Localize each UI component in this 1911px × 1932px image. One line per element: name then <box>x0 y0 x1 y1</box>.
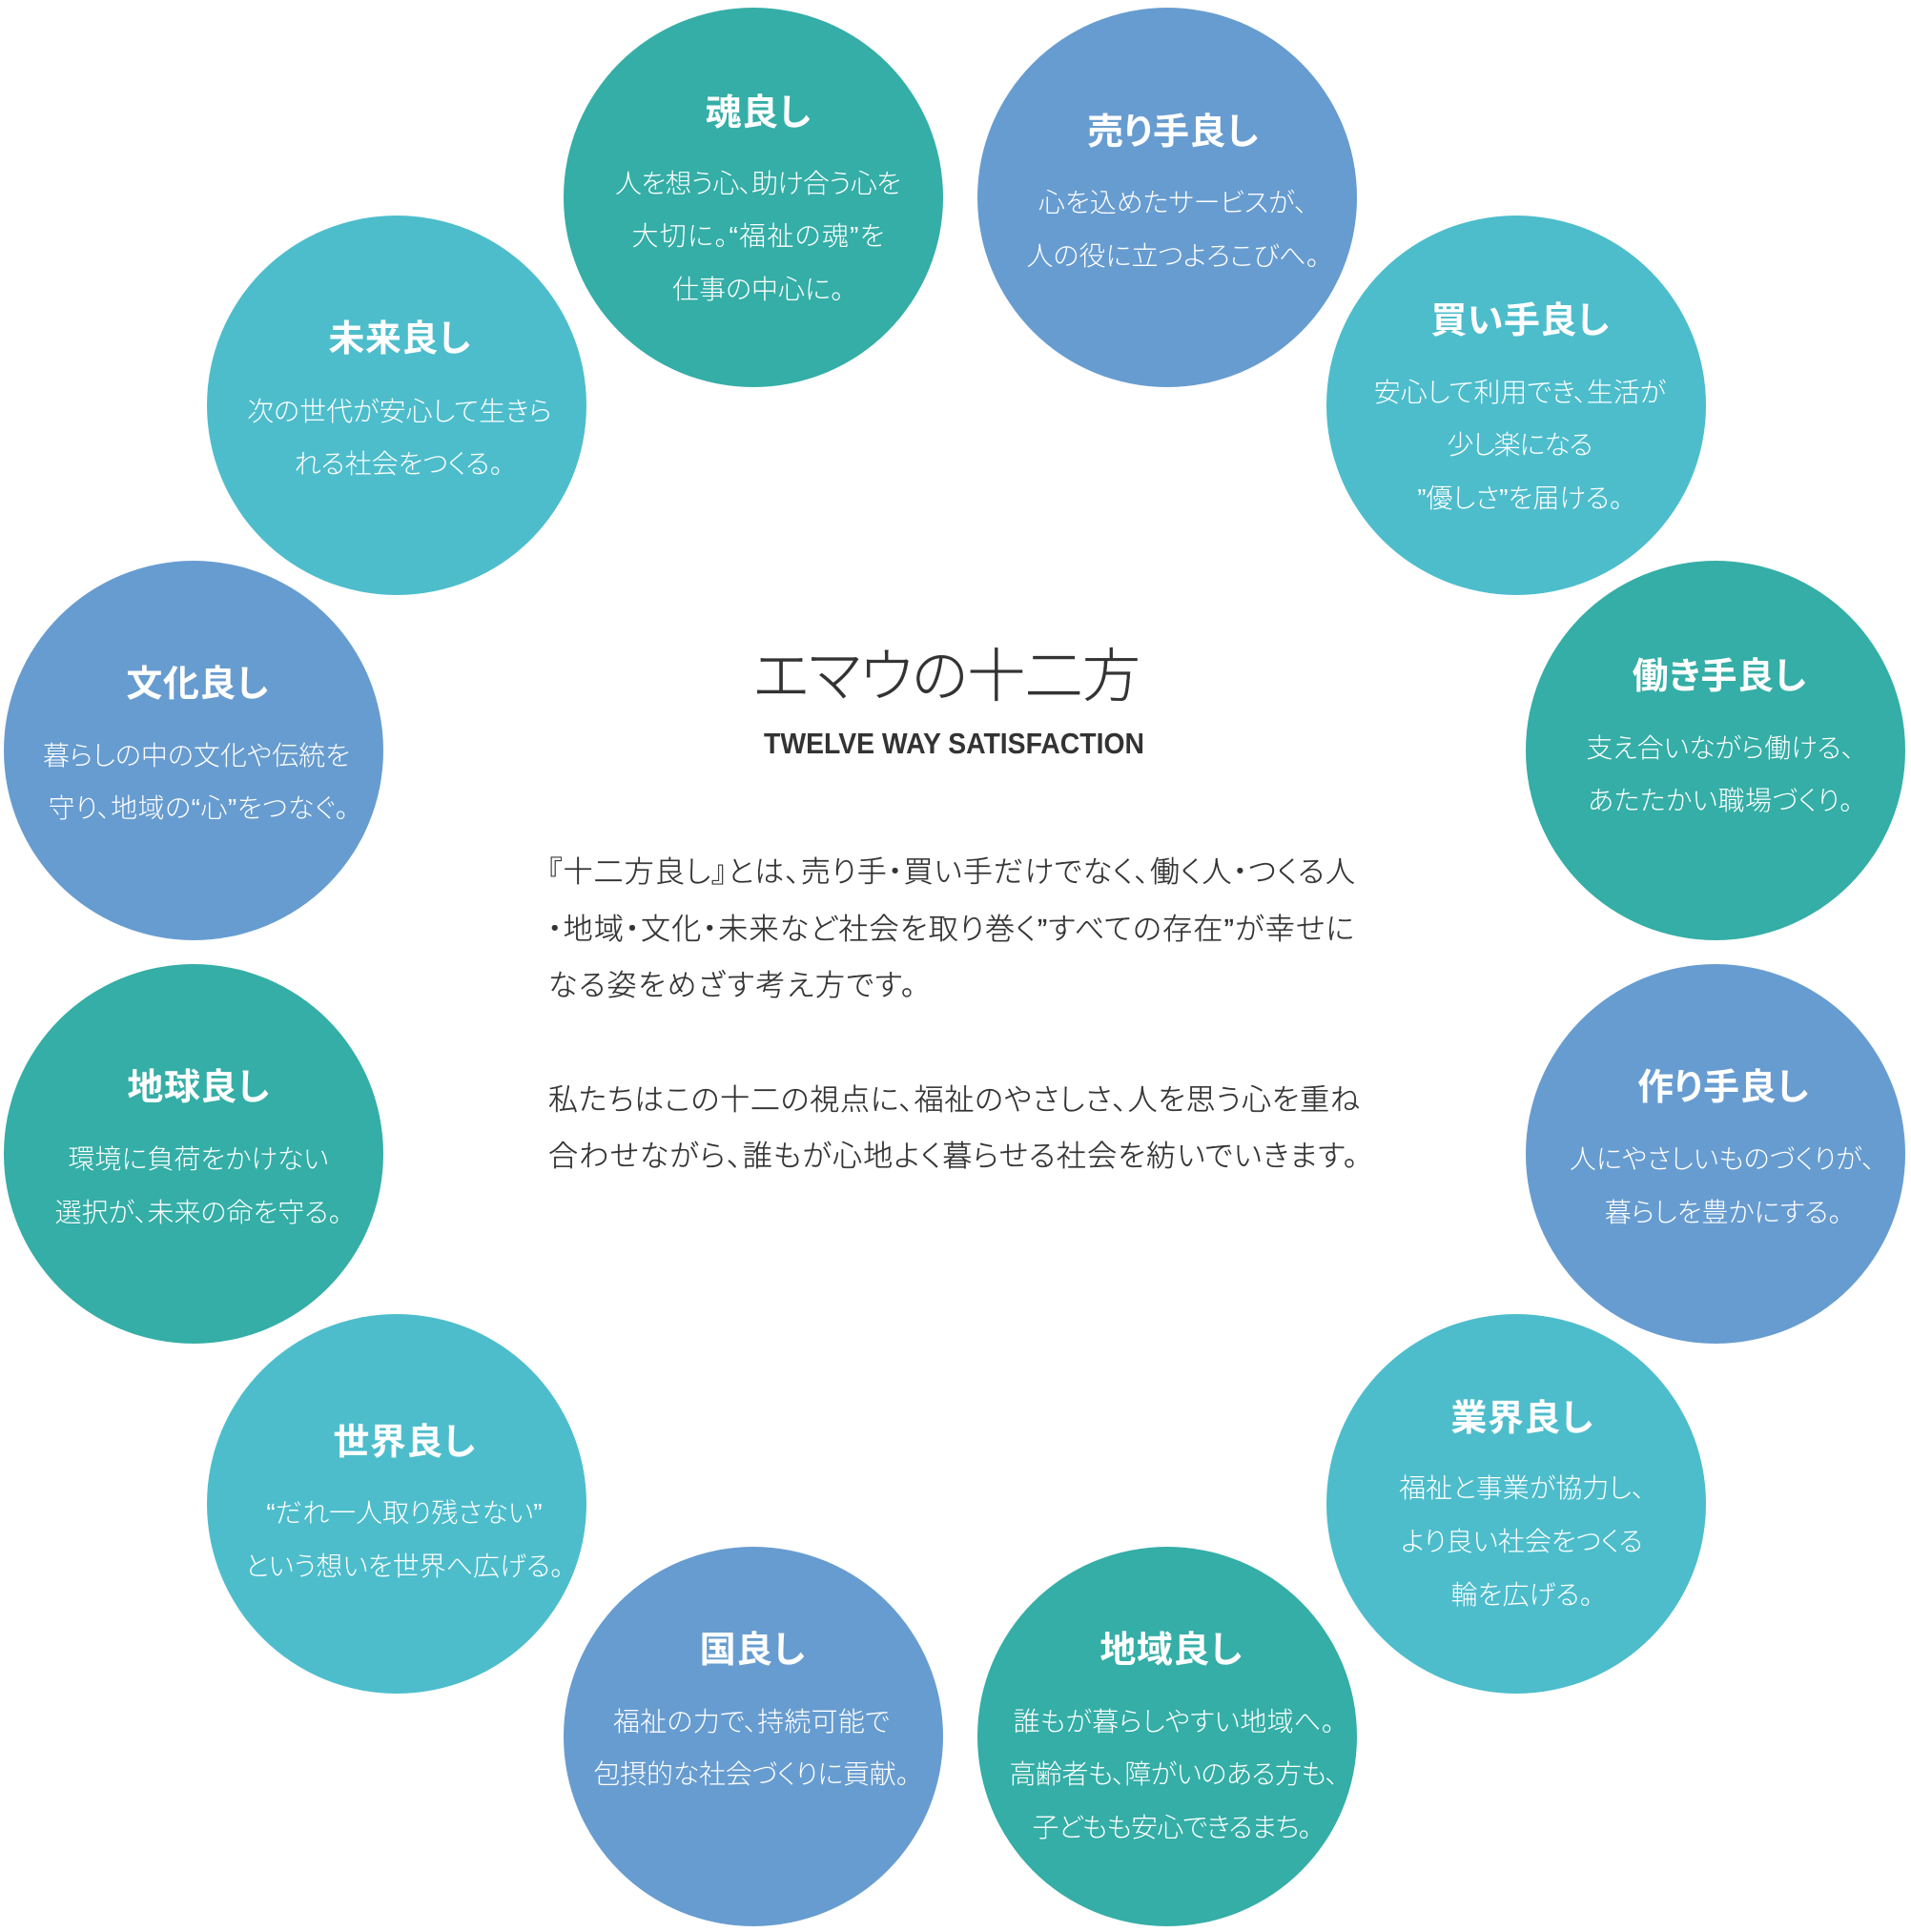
panel: 未来良し: れる社会をつくる。 <box>294 449 503 479</box>
panel: 未来良し: 次の世代が安心して生きら <box>247 397 552 426</box>
text block: description: 合わせながら、誰もが心地よく暮らせる社会を紡いでいきます。 <box>548 1140 1358 1173</box>
panel: 働き手良し: 支え合いながら働ける、 <box>1586 733 1855 763</box>
panel: 地球良し <box>4 964 383 1344</box>
panel: 魂良し: 人を想う心、助け合う心を <box>615 169 901 198</box>
panel: 売り手良し: 心を込めたサービスが、 <box>1038 188 1307 217</box>
text block: description: ・地域・文化・未来など社会を取り巻く”すべての存在”が幸せに <box>547 913 1354 946</box>
panel: 地球良し: 選択が、未来の命を守る。 <box>55 1198 341 1227</box>
panel: 業界良し <box>1326 1314 1706 1694</box>
panel: 魂良し: 大切に。“福祉の魂”を <box>631 221 885 251</box>
panel: 働き手良し <box>1526 561 1905 940</box>
panel: 地域良し: 子どもも安心できるまち。 <box>1032 1813 1312 1842</box>
panel: 地域良し: 高齢者も、障がいのある方も、 <box>1009 1759 1339 1789</box>
panel: 業界良し: 福祉と事業が協力し、 <box>1399 1473 1645 1503</box>
panel: 魂良し <box>564 8 943 387</box>
panel: 買い手良し: ”優しさ”を届ける。 <box>1417 483 1623 513</box>
panel: 世界良し: という想いを世界へ広げる。 <box>245 1552 564 1581</box>
panel: 文化良し: 守り、地域の“心”をつなぐ。 <box>48 793 349 823</box>
panel: 業界良し: 業界良し <box>1450 1399 1593 1439</box>
panel: 地域良し: 地域良し <box>1099 1631 1243 1671</box>
panel: 国良し: 国良し <box>700 1631 805 1671</box>
text block: description: なる姿をめざす考え方です。 <box>548 969 915 1002</box>
panel: 作り手良し <box>1526 964 1905 1344</box>
panel: 売り手良し: 売り手良し <box>1087 113 1259 153</box>
panel: 働き手良し: 働き手良し <box>1633 657 1806 697</box>
panel: 国良し: 包摂的な社会づくりに貢献。 <box>593 1759 910 1789</box>
panel: 働き手良し: あたたかい職場づくり。 <box>1588 786 1853 815</box>
panel: 作り手良し: 暮らしを豊かにする。 <box>1605 1198 1841 1227</box>
panel: 地域良し <box>977 1547 1357 1926</box>
panel: 世界良し: “だれ一人取り残さない” <box>266 1498 543 1528</box>
panel: 作り手良し: 作り手良し <box>1637 1068 1809 1108</box>
title: エマウの十二方 <box>753 644 1140 709</box>
text block: description: 『十二方良し』とは、売り手・買い手だけでなく、働く人・つくる人 <box>547 855 1355 889</box>
panel: 文化良し: 文化良し <box>126 665 269 705</box>
panel: 業界良し: 輪を広げる。 <box>1451 1580 1592 1610</box>
panel: 買い手良し <box>1326 216 1706 595</box>
panel: 未来良し <box>207 216 586 595</box>
panel: 文化良し <box>4 561 383 940</box>
panel: 買い手良し: 買い手良し <box>1430 301 1610 341</box>
panel: 地球良し: 地球良し <box>127 1068 270 1108</box>
panel: 魂良し: 仕事の中心に。 <box>672 275 844 304</box>
panel: 文化良し: 暮らしの中の文化や伝統を <box>43 741 350 771</box>
panel: 地域良し: 誰もが暮らしやすい地域へ。 <box>1013 1707 1335 1737</box>
panel: 未来良し: 未来良し <box>328 319 471 360</box>
panel: 国良し <box>564 1547 943 1926</box>
subtitle: TWELVE WAY SATISFACTION <box>764 727 1144 760</box>
panel: 国良し: 福祉の力で、持続可能で <box>613 1707 890 1737</box>
panel: 買い手良し: 安心して利用でき、生活が <box>1374 378 1667 407</box>
panel: 魂良し: 魂良し <box>706 93 811 134</box>
panel: 売り手良し: 人の役に立つよろこびへ。 <box>1026 241 1320 271</box>
panel: 地球良し: 環境に負荷をかけない <box>68 1144 329 1174</box>
panel: 作り手良し: 人にやさしいものづくりが、 <box>1570 1144 1875 1174</box>
text block: description <box>547 855 1360 1173</box>
panel: 世界良し: 世界良し <box>333 1423 476 1463</box>
text block: description: 私たちはこの十二の視点に、福祉のやさしさ、人を思う心を重ね <box>548 1083 1360 1117</box>
panel: 買い手良し: 少し楽になる <box>1448 430 1592 460</box>
panel: 業界良し: より良い社会をつくる <box>1401 1527 1643 1556</box>
panel: 売り手良し <box>977 8 1357 387</box>
panel: 世界良し <box>207 1314 586 1694</box>
